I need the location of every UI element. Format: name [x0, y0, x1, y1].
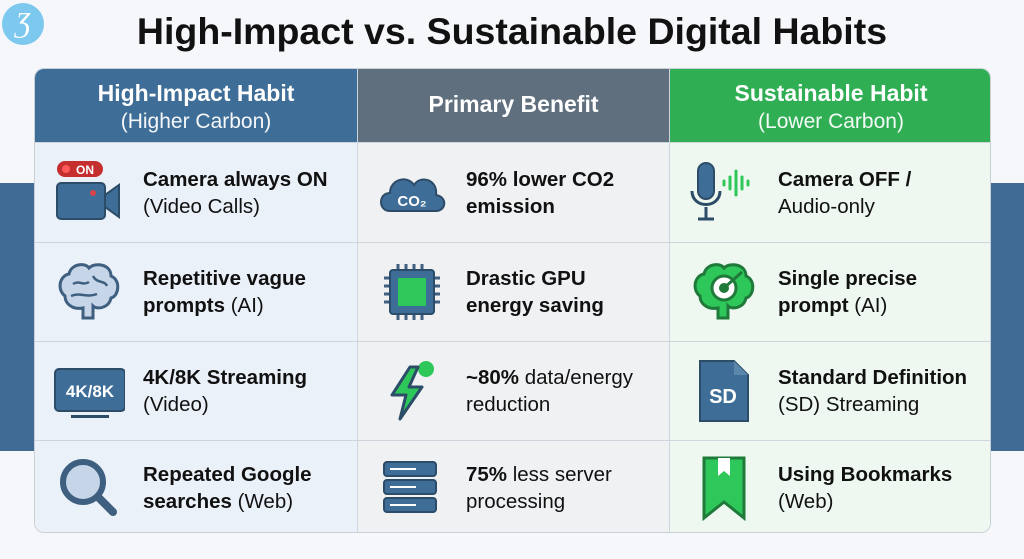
header: sustainable: Sustainable Habit	[734, 80, 927, 106]
row: vague prompts	[35, 242, 357, 341]
row: co2: emission	[466, 194, 555, 218]
row: SD	[670, 341, 992, 440]
row: GPU	[358, 242, 669, 341]
column: sustainable	[669, 69, 992, 532]
row: 80%: ~80% data/energy	[466, 366, 633, 389]
icon: 4K monitor	[54, 368, 125, 418]
row: audio: Camera OFF /	[778, 168, 911, 190]
row: bookmarks: Using Bookmarks	[778, 462, 952, 486]
icon: brain	[58, 263, 120, 320]
row: google searches: searches (Web)	[143, 490, 293, 512]
row: vague prompts: Repetitive vague	[143, 267, 306, 290]
row: camera on: Camera always ON	[143, 168, 328, 190]
row: 4K streaming	[35, 341, 357, 440]
column: high-impact	[35, 69, 357, 532]
row: GPU: Drastic GPU	[466, 267, 586, 290]
row: vague prompts: prompts (AI)	[143, 294, 264, 317]
row: co2	[358, 142, 669, 242]
row: co2: 96% lower CO2	[466, 168, 614, 190]
row: 80%: reduction	[466, 393, 550, 416]
icon: magnifier	[60, 459, 117, 516]
row: SD: Standard Definition	[778, 366, 967, 389]
row: bookmarks	[670, 440, 992, 534]
table	[34, 68, 991, 533]
row: audio	[670, 142, 992, 242]
icon: server stack	[383, 461, 437, 513]
icon: CO2 cloud: CO₂	[397, 192, 427, 210]
icon: CO2 cloud	[380, 178, 446, 212]
row: server: 75% less server	[466, 462, 612, 486]
row: camera on: (Video Calls)	[143, 194, 260, 218]
row: server: processing	[466, 490, 565, 512]
header: high-impact	[35, 69, 357, 142]
icon: video camera ON	[56, 161, 120, 220]
icon: bolt	[390, 361, 434, 420]
logo	[2, 3, 44, 45]
row: precise prompt	[670, 242, 992, 341]
column: benefit	[357, 69, 669, 532]
icon: 4K monitor: 4K/8K	[66, 382, 115, 401]
header: sustainable	[670, 69, 992, 142]
header: sustainable: (Lower Carbon)	[758, 110, 904, 133]
header: benefit	[358, 69, 669, 142]
row: audio: Audio-only	[778, 194, 875, 218]
icon: SD file: SD	[709, 386, 737, 408]
row: 4K streaming: 4K/8K Streaming	[143, 366, 307, 389]
icon: video camera ON: ON	[76, 162, 94, 176]
row: GPU: energy saving	[466, 294, 604, 317]
row: bookmarks: (Web)	[778, 490, 833, 512]
logo: Ʒ	[15, 8, 31, 39]
header: high-impact: High-Impact Habit	[98, 80, 294, 106]
icon: brain target	[694, 263, 754, 320]
row: precise prompt: Single precise	[778, 267, 917, 290]
icon: microphone	[690, 162, 750, 220]
row: google searches: Repeated Google	[143, 462, 312, 486]
row: server	[358, 440, 669, 534]
row: 80%	[358, 341, 669, 440]
icon: SD file	[699, 360, 749, 422]
row: SD: (SD) Streaming	[778, 393, 919, 416]
row: camera on	[35, 142, 357, 242]
row: 4K streaming: (Video)	[143, 393, 209, 416]
title: High-Impact vs. Sustainable Digital Habits	[137, 10, 887, 52]
row: google searches	[35, 440, 357, 534]
header: high-impact: (Higher Carbon)	[121, 110, 271, 133]
icon: chip	[384, 264, 440, 320]
icon: bookmark	[702, 456, 746, 522]
row: precise prompt: prompt (AI)	[778, 294, 887, 317]
header: benefit: Primary Benefit	[428, 91, 598, 117]
